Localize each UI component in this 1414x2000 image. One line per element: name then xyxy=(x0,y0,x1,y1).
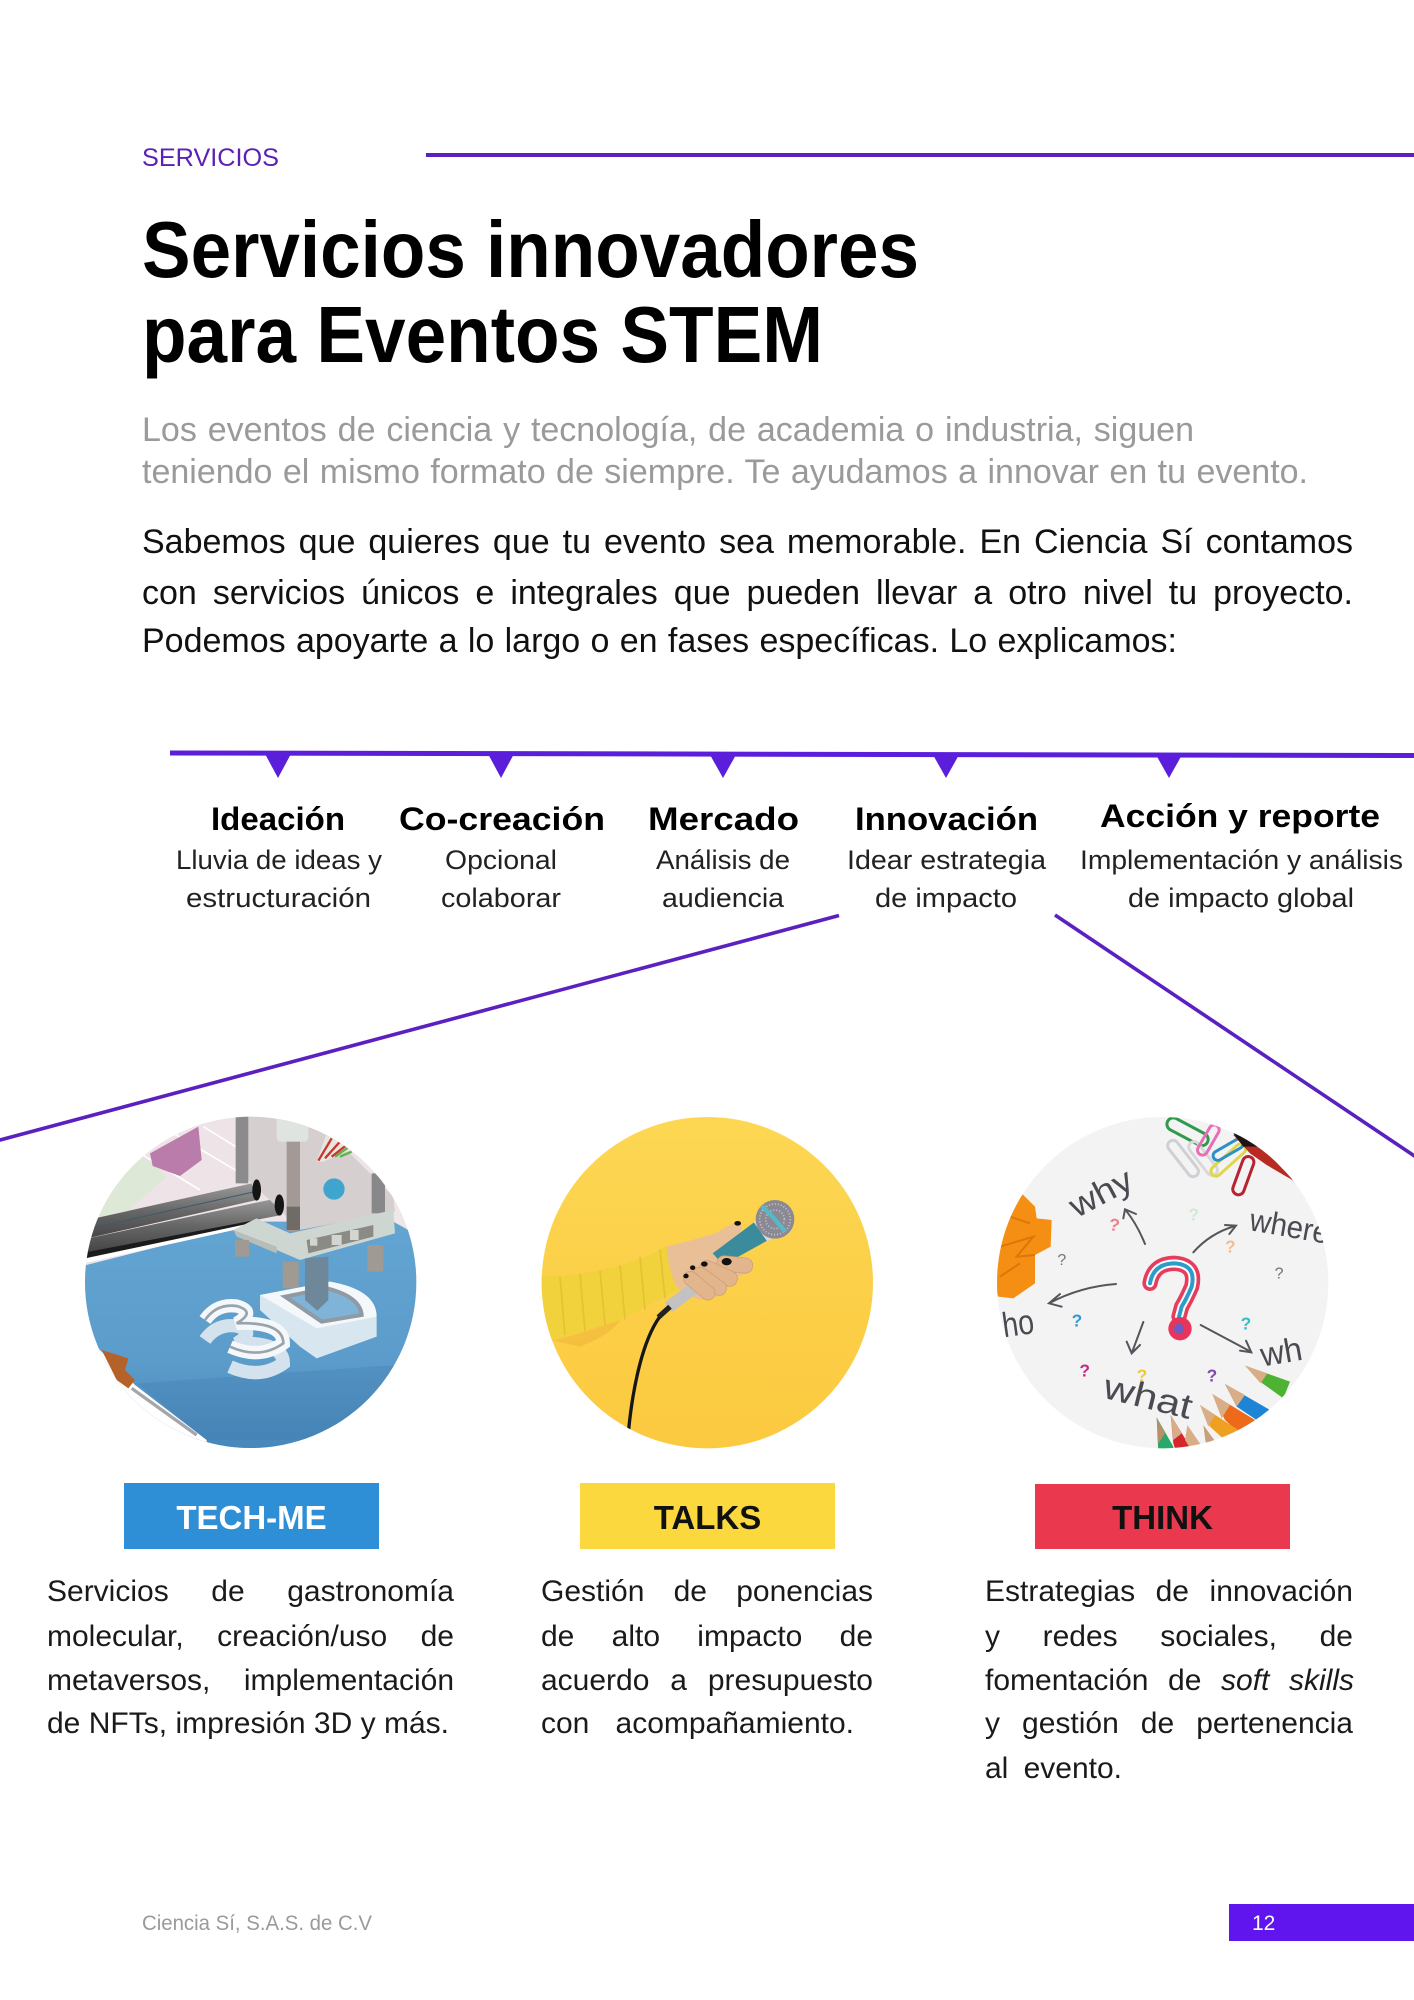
step: Ideación: Ideación xyxy=(211,801,345,837)
handwritten words: where xyxy=(1246,1201,1332,1251)
step: Ideación xyxy=(176,801,383,913)
step: Ideación: estructuración xyxy=(186,883,371,913)
marker: Mercado xyxy=(709,753,737,778)
intro paragraph grey: teniendo el mismo formato de siempre. Te ayudamos a innovar en tu evento. xyxy=(142,453,1308,491)
description: THINK: Estrategias de innovación xyxy=(985,1575,1353,1608)
header rule xyxy=(426,153,1414,157)
step: Innovación: de impacto xyxy=(875,883,1017,913)
step: Mercado: Análisis de xyxy=(656,845,790,875)
marker: Acción y reporte xyxy=(1155,753,1183,778)
handwritten words: why xyxy=(1062,1161,1140,1226)
arrows xyxy=(1049,1209,1251,1353)
page number: 12 xyxy=(1252,1912,1275,1935)
small question marks xyxy=(1057,1205,1284,1386)
timeline xyxy=(170,750,1414,778)
description: TALKS: de alto impacto de xyxy=(541,1620,873,1653)
description: THINK: al evento. xyxy=(985,1752,1122,1785)
label: TECH-ME: TECH-ME xyxy=(176,1499,327,1536)
step: Mercado: Mercado xyxy=(648,801,799,837)
step: Mercado: audiencia xyxy=(662,883,785,913)
marker: Co-creación xyxy=(487,752,515,778)
label: THINK xyxy=(1035,1484,1290,1549)
description: THINK: fomentación de soft skills xyxy=(985,1664,1354,1697)
central question mark xyxy=(1150,1263,1193,1317)
description: TALKS: Gestión de ponencias xyxy=(541,1575,873,1608)
description: TALKS xyxy=(541,1575,873,1740)
body paragraph xyxy=(142,523,1353,660)
pencils xyxy=(1245,1366,1290,1398)
handwritten words xyxy=(1000,1161,1332,1427)
marker: Innovación xyxy=(932,753,960,778)
step: Co-creación: colaborar xyxy=(441,883,561,913)
step: Co-creación xyxy=(399,801,605,913)
step: Acción y reporte: Implementación y análisis xyxy=(1080,845,1403,875)
description: TECH-ME xyxy=(47,1575,454,1740)
small question marks: ? xyxy=(1072,1311,1082,1331)
description: THINK xyxy=(985,1575,1354,1785)
step: Innovación xyxy=(847,801,1047,913)
step: Acción y reporte: de impacto global xyxy=(1128,883,1354,913)
description: THINK: y redes sociales, de xyxy=(985,1620,1353,1653)
description: TALKS: con acompañamiento. xyxy=(541,1707,854,1740)
title: Servicios innovadores xyxy=(142,205,919,294)
small question marks: ? xyxy=(1079,1361,1090,1381)
photo: 3D printer xyxy=(80,1113,423,1453)
crumpled paper xyxy=(993,1193,1052,1298)
photo: microphone xyxy=(540,1113,877,1453)
step: Acción y reporte: Acción y reporte xyxy=(1100,798,1380,834)
small question marks: ? xyxy=(1225,1237,1236,1257)
description: TECH-ME: metaversos, implementación xyxy=(47,1664,454,1697)
description: THINK: y gestión de pertenencia xyxy=(985,1707,1353,1740)
handwritten words: what xyxy=(1099,1367,1197,1427)
title xyxy=(142,205,919,379)
connector line left xyxy=(0,916,839,1140)
section label: SERVICIOS xyxy=(142,144,279,172)
description: TECH-ME: de NFTs, impresión 3D y más. xyxy=(47,1707,449,1740)
number 3 xyxy=(205,1306,283,1373)
label: TECH-ME xyxy=(124,1483,379,1549)
photo: question words xyxy=(993,1113,1333,1453)
small question marks: ? xyxy=(1137,1366,1147,1386)
step: Acción y reporte xyxy=(1080,798,1403,913)
intro paragraph grey xyxy=(142,411,1308,491)
handwritten words: ho xyxy=(1000,1302,1036,1345)
step: Ideación: Lluvia de ideas y xyxy=(176,845,383,875)
body paragraph: Sabemos que quieres que tu evento sea memorable. En Ciencia Sí contamos xyxy=(142,523,1353,561)
step: Co-creación: Co-creación xyxy=(399,801,605,837)
handwritten words: wh xyxy=(1257,1331,1305,1375)
label: TALKS: TALKS xyxy=(654,1499,761,1536)
body paragraph: Podemos apoyarte a lo largo o en fases específicas. Lo explicamos: xyxy=(142,622,1177,660)
page number xyxy=(1229,1904,1414,1941)
step: Mercado xyxy=(648,801,799,913)
small question marks: ? xyxy=(1057,1252,1066,1269)
description: TECH-ME: Servicios de gastronomía xyxy=(47,1575,454,1608)
paper clips xyxy=(1165,1116,1255,1196)
step: Co-creación: Opcional xyxy=(445,845,557,875)
label: THINK: THINK xyxy=(1112,1499,1213,1536)
body paragraph: con servicios únicos e integrales que pueden llevar a otro nivel tu proyecto. xyxy=(142,574,1353,612)
connector line right xyxy=(1055,915,1414,1157)
marker: Ideación xyxy=(264,752,292,778)
small question marks: ? xyxy=(1108,1214,1121,1235)
description: TECH-ME: molecular, creación/uso de xyxy=(47,1620,454,1653)
label: TALKS xyxy=(580,1483,835,1549)
small question marks: ? xyxy=(1275,1265,1284,1282)
step: Innovación: Idear estrategia xyxy=(847,845,1047,875)
footer credit: Ciencia Sí, S.A.S. de C.V xyxy=(142,1912,372,1935)
step: Innovación: Innovación xyxy=(855,801,1038,837)
small question marks: ? xyxy=(1188,1205,1199,1225)
title: para Eventos STEM xyxy=(142,290,823,379)
description: TALKS: acuerdo a presupuesto xyxy=(541,1664,873,1697)
intro paragraph grey: Los eventos de ciencia y tecnología, de academia o industria, siguen xyxy=(142,411,1194,449)
small question marks: ? xyxy=(1241,1313,1251,1333)
small question marks: ? xyxy=(1207,1366,1217,1386)
